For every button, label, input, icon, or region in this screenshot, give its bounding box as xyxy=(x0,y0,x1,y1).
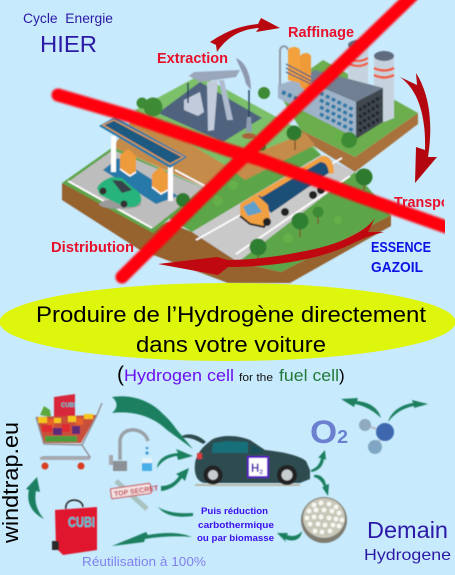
banner text: Produire de l’Hydrogène directement xyxy=(36,302,427,327)
heading: Demain: Demain xyxy=(367,517,448,543)
yellow ellipse banner xyxy=(0,283,455,361)
green arrows xyxy=(26,396,428,546)
pump right xyxy=(152,167,168,194)
station block xyxy=(62,147,205,233)
arrow: secret to car xyxy=(161,468,189,491)
arrow: car to pellets xyxy=(314,475,329,496)
lower road block xyxy=(192,155,391,272)
canopy xyxy=(99,117,187,168)
label: Distribution: Distribution xyxy=(51,239,134,256)
arrow: extraction to raffinage xyxy=(210,18,280,52)
bottom illustrations xyxy=(26,394,428,555)
process text: Puis réduction: Puis réduction xyxy=(201,506,268,517)
island: brown soil sides xyxy=(62,113,418,283)
icon: dark green car xyxy=(182,434,310,486)
petrol station xyxy=(99,117,187,201)
arrow: car to O2 xyxy=(311,450,326,472)
arrow: cubi to cart xyxy=(26,477,44,519)
refinery orange tanks xyxy=(280,46,311,91)
arrow: raffinage to transport xyxy=(400,73,437,183)
arrow: pellets to process xyxy=(277,531,302,542)
trees xyxy=(136,87,372,262)
pump left xyxy=(120,149,136,176)
label: Réutilisation à 100%: Réutilisation à 100% xyxy=(82,554,206,569)
subtitle: hydrogen cell for the fuel cell: ) xyxy=(339,366,345,385)
subtitle: hydrogen cell for the fuel cell xyxy=(117,363,345,386)
heading: Hydrogene: Hydrogene xyxy=(364,547,451,564)
right edge background mask xyxy=(445,0,455,275)
oil pump pad xyxy=(158,82,262,142)
subtitle: hydrogen cell for the fuel cell: Hydrogen cell xyxy=(124,366,234,385)
heading: HIER: HIER xyxy=(40,31,97,57)
icon: CUBI box: CUBI xyxy=(68,514,95,531)
arrow: molecule left xyxy=(341,398,381,418)
process text: Puis réduction: ou par biomasse xyxy=(197,533,274,544)
icon: water tap and glass xyxy=(109,430,152,471)
arrow: molecule right xyxy=(388,400,428,422)
process text: Puis réduction: carbothermique xyxy=(198,520,274,531)
tanker truck xyxy=(240,156,334,227)
heading: Cycle Energie: Cycle Energie xyxy=(23,10,113,26)
icon: CUBI box xyxy=(52,500,97,555)
label: ESSENCE GAZOIL xyxy=(371,239,431,276)
refinery chimneys xyxy=(348,40,394,122)
process text: Puis réduction xyxy=(197,506,274,544)
red cross-out strokes xyxy=(58,0,446,277)
icon: H2 badge: 2 xyxy=(259,469,263,476)
icon: top secret test tube xyxy=(110,481,159,509)
icon: H2 badge: H xyxy=(251,463,259,475)
icon: shopping cart: CUBI xyxy=(61,403,76,409)
banner text xyxy=(36,302,427,357)
icon: O2: O2 xyxy=(310,414,348,450)
refinery building xyxy=(278,70,383,139)
label: Extraction: Extraction xyxy=(157,50,228,67)
icon: H2 badge xyxy=(248,457,268,477)
label: ESSENCE GAZOIL: GAZOIL xyxy=(371,259,423,276)
green car xyxy=(97,177,141,209)
label: Raffinage: Raffinage xyxy=(288,24,354,41)
island: green ground upper block xyxy=(113,75,321,232)
icon: bowl of pellets xyxy=(301,497,347,543)
arrow: secret to process xyxy=(158,507,193,517)
icon: top secret test tube: TOP SECRET xyxy=(114,485,159,498)
banner text: dans votre voiture xyxy=(136,332,326,357)
icon: molecule xyxy=(359,419,394,454)
oil pump jack xyxy=(184,58,256,139)
subtitle: hydrogen cell for the fuel cell: for the xyxy=(239,372,273,384)
refinery platform xyxy=(278,60,418,157)
arrow: cart to car xyxy=(112,396,193,449)
arrow: process to cubi xyxy=(112,532,192,546)
icon: shopping cart xyxy=(36,394,102,470)
illustration: petrol energy cycle island xyxy=(62,40,418,283)
subtitle: hydrogen cell for the fuel cell: fuel cell xyxy=(279,366,339,385)
arrow: transport to distribution xyxy=(158,218,384,275)
label: ESSENCE GAZOIL: ESSENCE xyxy=(371,239,431,256)
arrow: tap to car xyxy=(157,449,193,468)
subtitle: hydrogen cell for the fuel cell: ( xyxy=(117,363,124,386)
